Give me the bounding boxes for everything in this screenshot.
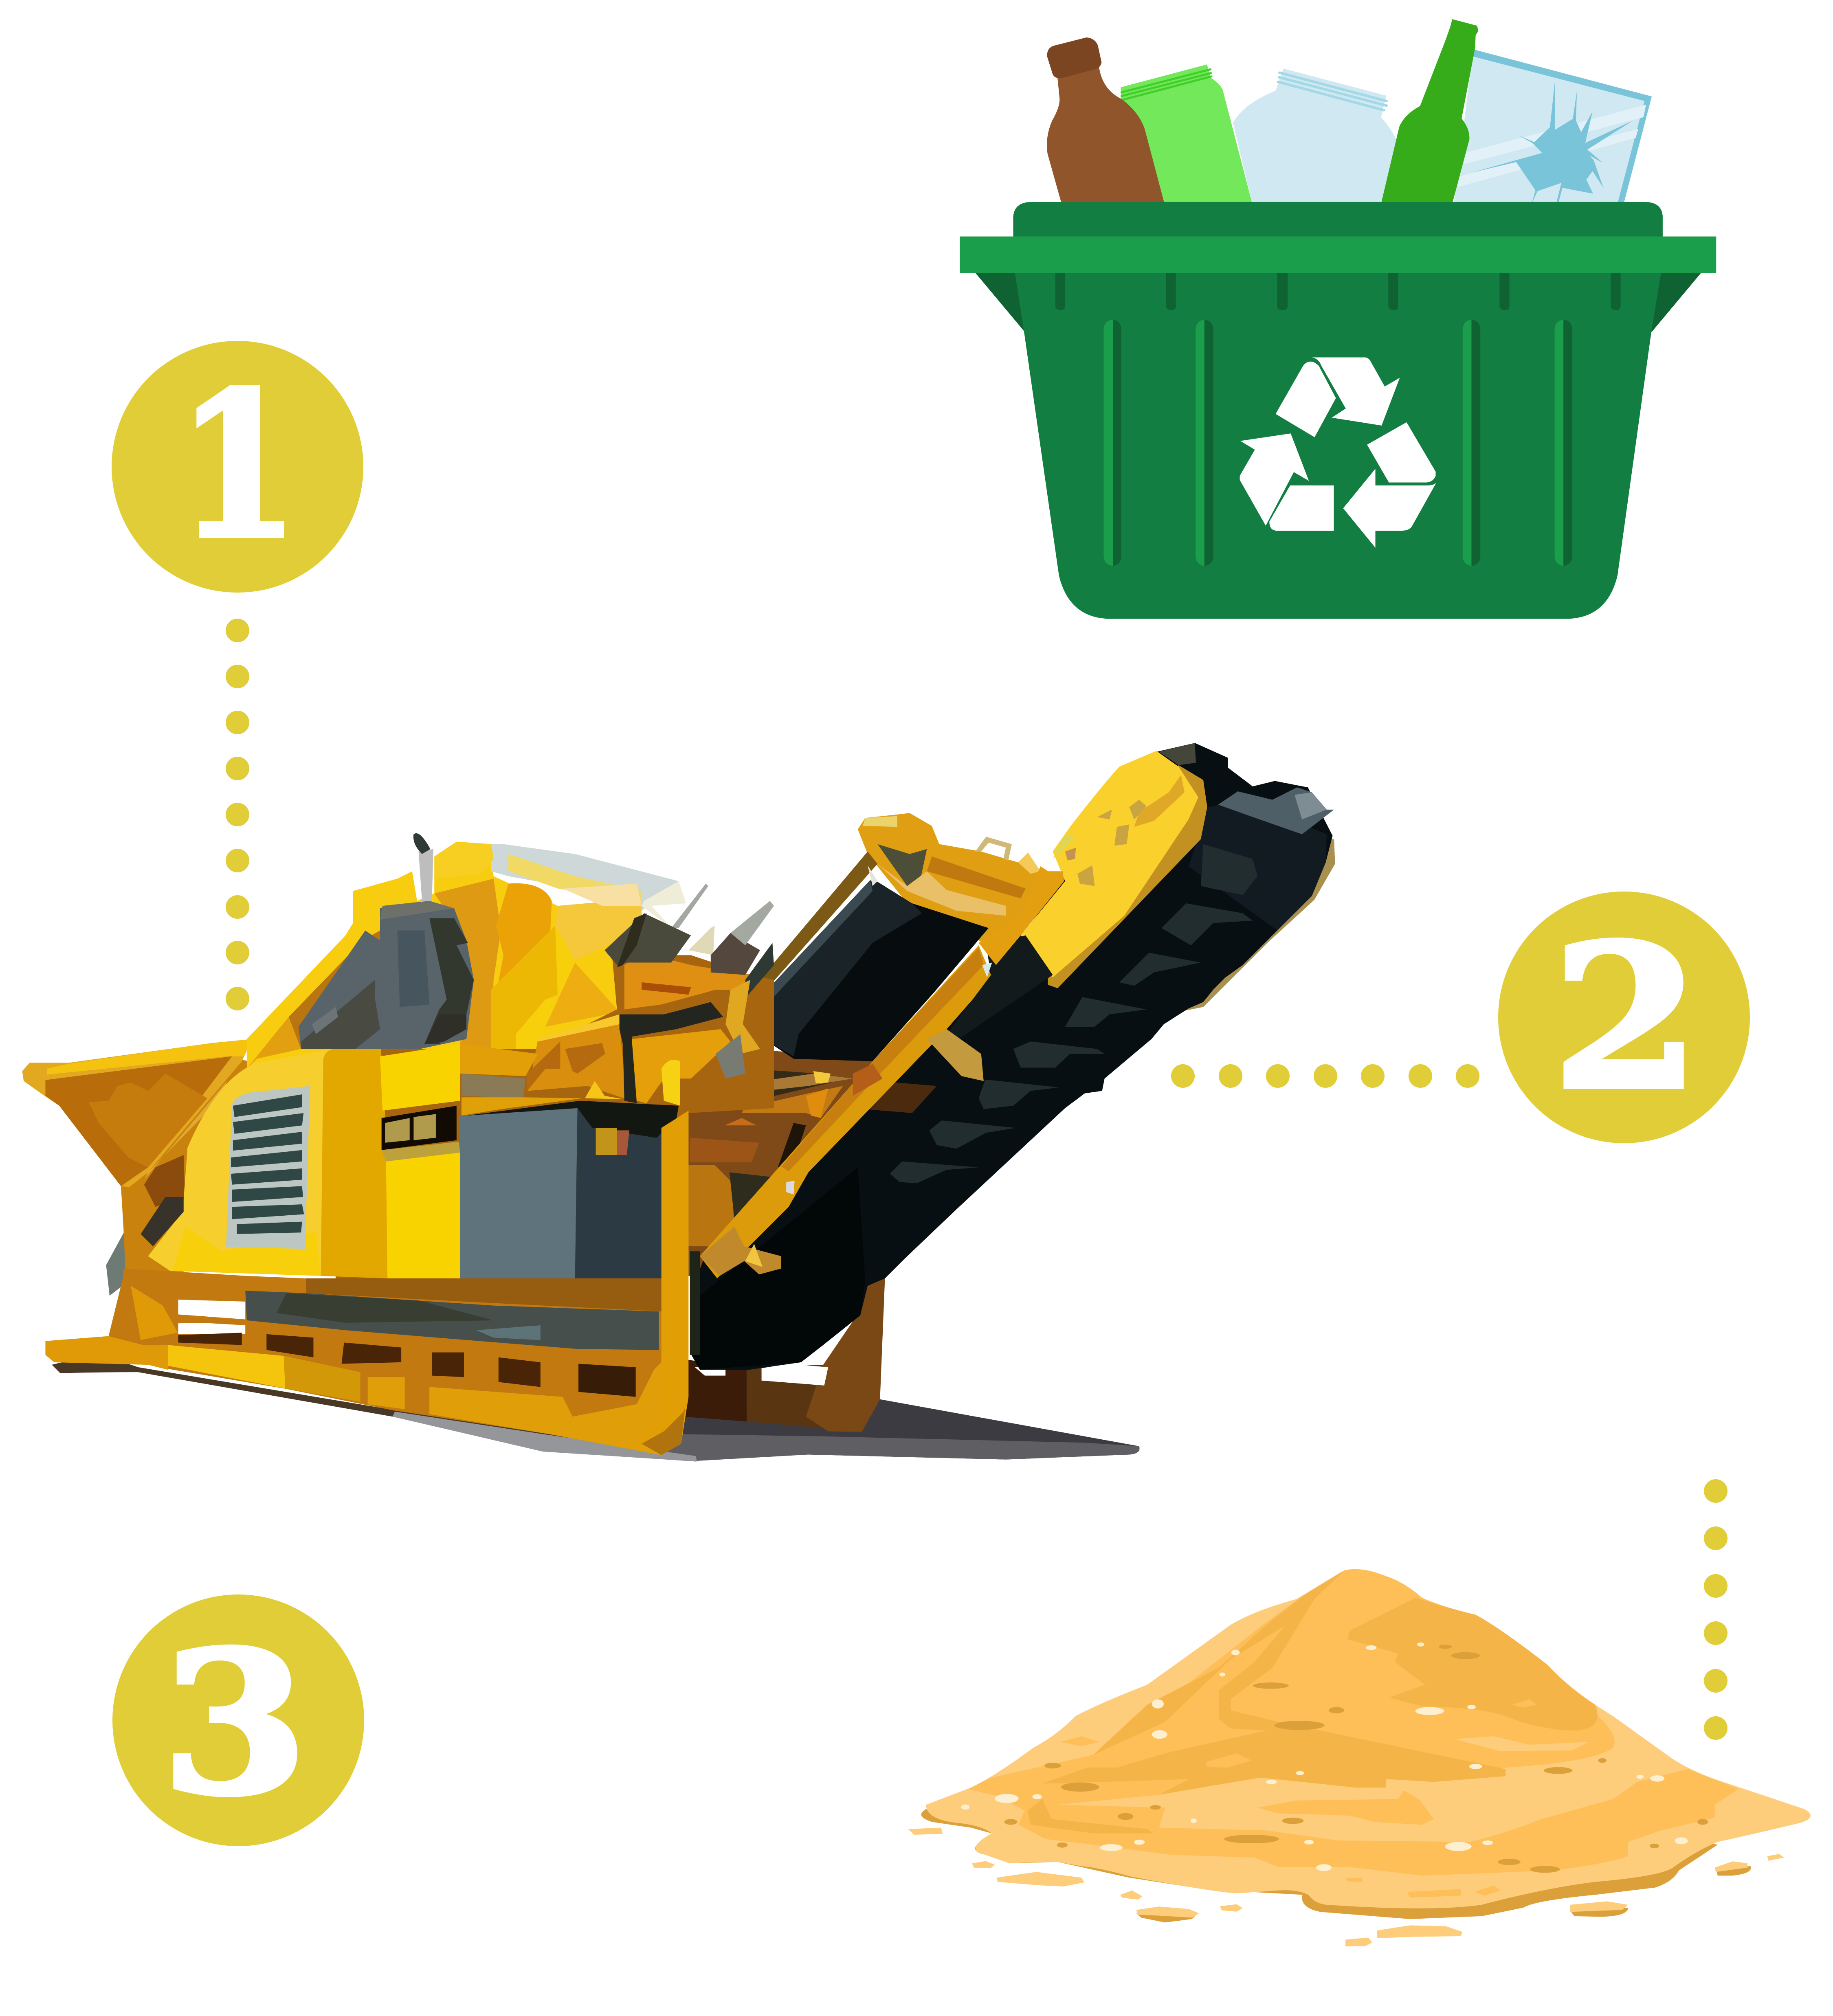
machine interior [688,1049,937,1355]
inner hopper belt [743,852,989,1061]
bin body [1015,272,1661,619]
sand mid layer [968,1569,1738,1875]
sand shadow [921,1809,1718,1919]
hopper [22,1039,252,1207]
badge: step 1 [112,341,363,593]
dark pipes and frame [604,901,774,1106]
white gaps [178,1300,245,1334]
left grey panel [106,1232,126,1296]
icon: broken glass pane [1454,49,1652,204]
scattered sand grains [908,1827,1784,1946]
illustration: sand pile [908,1569,1811,1946]
icon: recycling symbol [1240,358,1436,548]
frame holes [178,1333,541,1387]
yellow conveyor arm [1021,751,1198,977]
bin lid [1013,202,1663,241]
sand base [926,1569,1811,1908]
upper hopper frame [858,813,1064,945]
icon: brown bottle [1047,37,1165,204]
sand lighter patches [1455,1736,1589,1751]
ground shadow [660,1399,1140,1461]
illustration: conveyor crusher machine [22,743,1335,1461]
engine hood [148,1049,389,1278]
top housing [434,843,708,1049]
dark underside [52,1359,696,1461]
icon: green jar [1121,64,1252,204]
badge: step 3 [112,1594,364,1846]
track highlights [890,844,1257,1183]
orange side blocks [460,1015,627,1116]
badge: step 2: 2 [1552,902,1700,1133]
exhaust stack [413,833,433,901]
sand darker layer upper [1347,1598,1598,1731]
interior backing [336,955,774,1281]
bin tabs [1055,273,1621,310]
machine: main left section [22,833,774,1461]
badge: step 2 [1498,892,1750,1143]
icon: green bottle [1381,19,1478,204]
grille [226,1086,310,1249]
sand dark flecks [1004,1645,1708,1873]
grey battery box [460,1101,679,1278]
transfer pipes [690,1027,853,1111]
conveyor belt track [690,743,1333,1370]
engine block [299,901,474,1056]
sand white flecks [961,1643,1688,1871]
icon: recycling bin with glass [960,19,1716,619]
bin rim [960,237,1716,273]
yellow vertical post [637,1111,688,1444]
dotted connector: step 3 [1704,1479,1728,1740]
bin grooves [1103,320,1572,566]
lower frame [45,1269,688,1455]
label plate [382,1106,457,1150]
left dark fitting [141,1197,184,1246]
dark belt lower section [690,1167,865,1370]
dotted connector: step 1 [226,619,249,1010]
bin sides [975,272,1702,332]
hopper support column [121,1059,257,1278]
icon: clear plastic jar [1233,68,1397,204]
engine cover diagonal [247,842,622,1069]
yellow arm shade [1048,765,1207,988]
lower engine band [245,1291,659,1350]
badge: step 3: 3 [161,1608,308,1838]
track tan edge [1178,839,1335,1012]
machine: right section with conveyor [660,743,1335,1461]
dotted connector: step 2 [1171,1064,1479,1088]
diagonal yellow arm [700,866,1064,1278]
side panel yellow [380,1044,460,1279]
support legs [683,1278,885,1432]
badge: step 1: 1 [177,348,299,583]
